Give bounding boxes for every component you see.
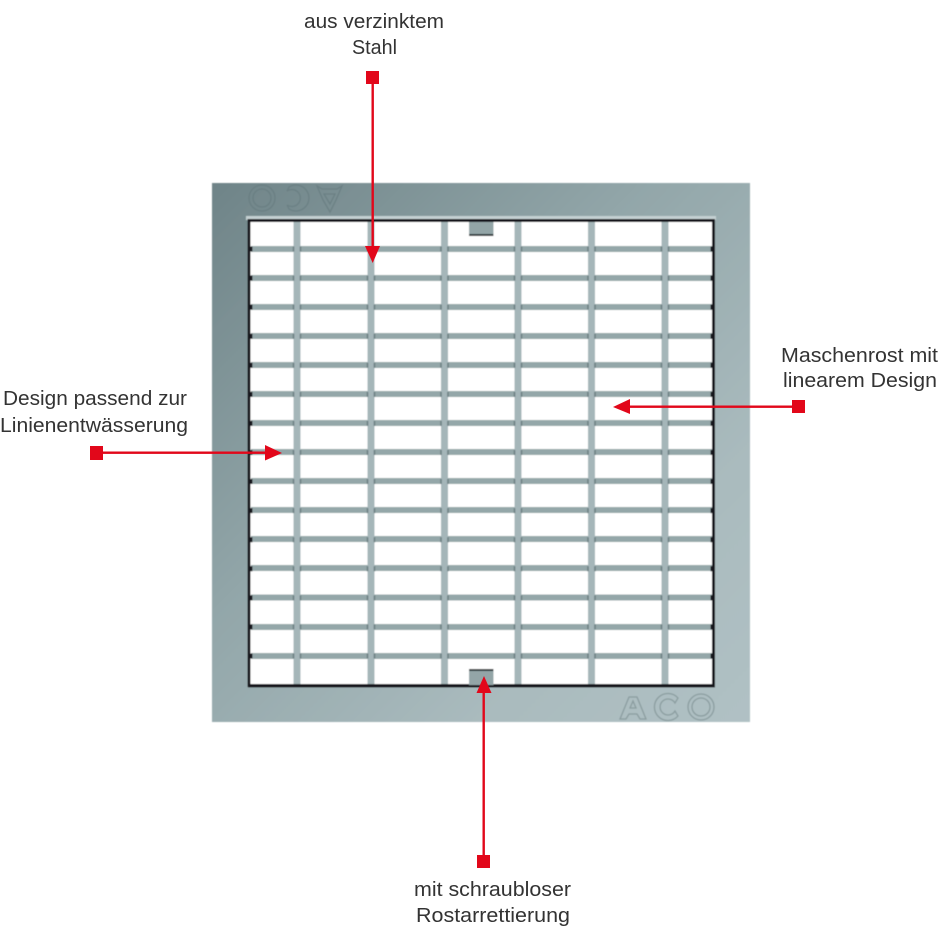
label: mit schraubloser Rostarrettierung bbox=[414, 879, 571, 927]
bar crossing knots bbox=[294, 246, 668, 660]
label: aus verzinktem Stahl bbox=[304, 11, 444, 59]
outer frame bbox=[212, 183, 750, 722]
arrow: bottom callout bbox=[476, 676, 492, 868]
label: Design passend zur Linienentwässerung: Linienentwässerung bbox=[0, 415, 188, 437]
label: aus verzinktem Stahl: Stahl bbox=[352, 37, 397, 59]
label: Maschenrost mit linearem Design: Maschenrost mit bbox=[781, 345, 938, 367]
drainage grate bbox=[212, 183, 750, 722]
bottom edge shadow bbox=[248, 684, 715, 688]
vertical bars bbox=[294, 222, 668, 684]
label: Maschenrost mit linearem Design bbox=[781, 345, 938, 392]
label: mit schraubloser Rostarrettierung: mit schraubloser bbox=[414, 879, 571, 901]
frame top highlight bbox=[246, 216, 716, 220]
label: Design passend zur Linienentwässerung bbox=[0, 388, 188, 437]
embossed logo bottom bbox=[620, 693, 714, 720]
label: Design passend zur Linienentwässerung: Design passend zur bbox=[3, 388, 187, 410]
label: mit schraubloser Rostarrettierung: Rostarrettierung bbox=[416, 905, 570, 927]
grate opening bbox=[249, 220, 714, 686]
arrow: top callout bbox=[365, 71, 380, 263]
bottom retaining clip bbox=[469, 669, 494, 685]
top retaining clip bbox=[469, 222, 494, 236]
label: aus verzinktem Stahl: aus verzinktem bbox=[304, 11, 444, 33]
label: Maschenrost mit linearem Design: linearem Design bbox=[783, 370, 937, 392]
arrow: right callout bbox=[613, 399, 805, 414]
bar ends on frame bbox=[252, 246, 712, 660]
embossed logo top, rotated bbox=[249, 185, 342, 212]
horizontal bars bbox=[251, 246, 712, 659]
arrow: left callout bbox=[90, 445, 282, 460]
